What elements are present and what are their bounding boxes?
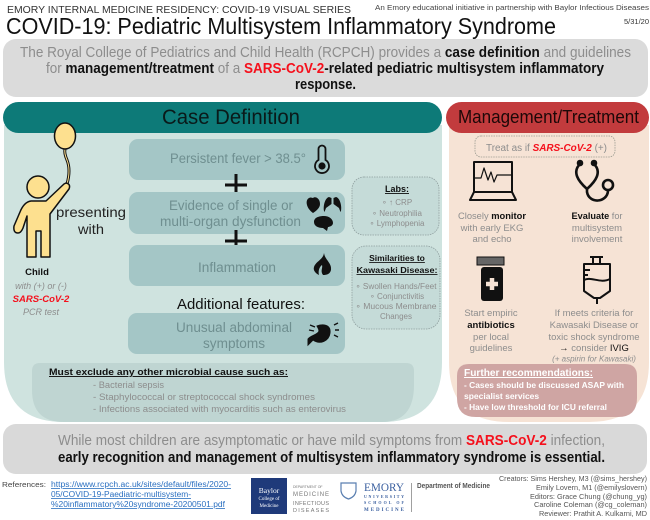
reference link: https://www.rcpch.ac.uk/sites/default/files/2020-: [51, 480, 231, 489]
further recommendations box: - Have low threshold for ICU referral: [464, 402, 607, 412]
labs box: ∘ ↑ CRP: [382, 198, 412, 207]
criterion: organ dysfunction: multi-organ dysfunction: [160, 214, 301, 229]
date: 5/31/20: [624, 17, 649, 26]
child caption: Child: [25, 267, 49, 278]
header series line: EMORY INTERNAL MEDICINE RESIDENCY: COVID-19 VISUAL SERIES: [7, 4, 351, 16]
presenting with label: presenting: [56, 204, 126, 220]
exclusion box: - Infections associated with myocarditis such as enterovirus: [93, 404, 347, 414]
criterion: inflammation: [129, 245, 345, 286]
reference link: %20inflammatory%20syndrome-20200501.pdf: [51, 500, 226, 509]
logo: department of medicine infectious diseases: INFECTIOUS: [293, 501, 329, 507]
criterion: persistent fever: Persistent fever > 38.5°: [170, 151, 306, 166]
title: COVID-19: Pediatric Multisystem Inflammatory Syndrome: [6, 13, 556, 39]
icon: heart, lungs and brain: [307, 197, 341, 231]
IVIG text: Kawasaki Disease or: [550, 320, 638, 331]
conclusion panel: early recognition and management of multisystem inflammatory syndrome is essential.: [58, 450, 605, 466]
IVIG text: [548, 308, 640, 364]
further recommendations box: Further recommendations:: [464, 368, 593, 379]
IVIG text: (+ aspirin for Kawasaki): [552, 354, 636, 364]
IVIG text: → consider IVIG: [559, 343, 629, 354]
labs box: [352, 177, 439, 235]
logo: Emory School of Medicine: UNIVERSITY: [364, 494, 404, 499]
intro panel: The Royal College of Pediatrics and Child Health (RCPCH) provides a case definition and guidelines: [20, 45, 631, 61]
conclusion panel: [3, 424, 647, 474]
presenting with label: [56, 204, 126, 237]
child caption: PCR test: [23, 307, 60, 317]
icon: monitor: [470, 162, 516, 200]
intro panel: [3, 39, 648, 97]
logo: department of medicine infectious diseases: DISEASES: [293, 508, 329, 514]
criterion: abdominal symptoms: Unusual abdominal: [176, 320, 292, 335]
case definition heading bar: [3, 102, 442, 133]
panel: management/treatment: [446, 102, 649, 422]
antibiotics text: per local: [473, 332, 509, 343]
logo: Emory School of Medicine: [364, 482, 405, 513]
exclusion box: [32, 363, 414, 422]
child caption: [13, 267, 70, 317]
references label: References:: [2, 480, 46, 489]
labs box: Labs:: [385, 184, 409, 194]
credits: Reviewer: Prathit A. Kulkarni, MD: [539, 509, 648, 518]
icon: antibiotics bottle: [477, 257, 504, 301]
kawasaki similarities box: ∘ Conjunctivitis: [370, 292, 424, 301]
additional features heading: Additional features:: [177, 297, 305, 313]
kawasaki similarities box: ∘ Mucous Membrane: [356, 302, 437, 311]
logo: department of medicine infectious diseases: DEPARTMENT OF: [293, 485, 323, 489]
evaluate text: multisystem: [572, 223, 622, 234]
kawasaki similarities box: Changes: [380, 312, 412, 321]
credits: Caroline Coleman (@cg_coleman): [534, 500, 647, 509]
evaluate text: Evaluate for: [572, 211, 622, 222]
logo: Baylor College of Medicine: Baylor: [259, 486, 280, 495]
child caption: with (+) or (-): [15, 281, 67, 291]
logo: Emory shield: [341, 483, 356, 499]
credits: Creators: Sims Hershey, M3 (@sims_hershey): [499, 474, 647, 483]
monitor text: Closely monitor: [458, 211, 526, 222]
reference link: [51, 480, 231, 509]
plus sign: [225, 230, 247, 252]
panel: case definition: [3, 102, 442, 422]
labs box: ∘ Neutrophilia: [372, 209, 423, 218]
antibiotics text: antibiotics: [467, 320, 515, 331]
monitor text: [458, 211, 526, 245]
plus sign: [225, 174, 247, 196]
further recommendations box: - Cases should be discussed ASAP with: [464, 380, 624, 390]
credits: Emily Lovern, M1 (@emilyslovern): [536, 483, 647, 492]
treat as if callout: [475, 136, 615, 157]
reference link: 05/COVID-19-Paediatric-multisystem-: [51, 490, 191, 499]
kawasaki similarities box: ∘ Swollen Hands/Feet: [356, 282, 437, 291]
further recommendations box: [457, 364, 637, 417]
case definition heading bar: Case Definition: [162, 106, 300, 129]
logo: Baylor College of Medicine: [251, 478, 287, 514]
criterion: inflammation: Inflammation: [198, 260, 276, 275]
antibiotics text: Start empiric: [464, 308, 518, 319]
exclusion box: - Staphylococcal or streptococcal shock syndromes: [93, 392, 316, 402]
logo: department of medicine infectious diseases: [293, 485, 329, 514]
icon: IV bag: [584, 257, 610, 304]
child caption: SARS-CoV-2: [13, 294, 70, 305]
conclusion panel: While most children are asymptomatic or have mild symptoms from SARS-CoV-2 infection,: [58, 433, 605, 449]
evaluate text: involvement: [572, 234, 623, 245]
icon: stomach: [308, 323, 339, 345]
criterion: organ dysfunction: [129, 192, 345, 234]
icon: stethoscope: [576, 161, 613, 201]
logo: Baylor College of Medicine: College of: [259, 497, 280, 502]
criterion: persistent fever: [129, 139, 345, 180]
logo: Emory School of Medicine: SCHOOL OF: [364, 500, 405, 505]
intro panel: for management/treatment of a SARS-CoV-2-related pediatric multisystem inflammatory: [46, 61, 604, 77]
logo: department of medicine infectious diseases: MEDICINE: [293, 492, 329, 498]
logo: Emory School of Medicine: EMORY: [364, 482, 405, 494]
criterion: organ dysfunction: Evidence of single or: [169, 198, 293, 213]
exclusion box: Must exclude any other microbial cause such as:: [49, 367, 288, 378]
kawasaki similarities box: [352, 246, 440, 329]
icon: thermometer: [315, 146, 329, 173]
credits: Editors: Grace Chung (@chung_yg): [530, 492, 647, 501]
credits: [499, 474, 648, 518]
evaluate text: [572, 211, 623, 245]
management heading bar: Management/Treatment: [458, 107, 639, 127]
management heading bar: [446, 102, 649, 133]
further recommendations box: specialist services: [464, 391, 539, 401]
icon: flame: [314, 253, 331, 275]
IVIG text: If meets criteria for: [555, 308, 633, 319]
antibiotics text: guidelines: [470, 343, 513, 354]
logo: Emory School of Medicine: MEDICINE: [364, 508, 405, 513]
department of medicine label: [411, 483, 490, 512]
department of medicine label: Department of Medicine: [417, 483, 490, 490]
exclusion box: - Bacterial sepsis: [93, 380, 165, 390]
kawasaki similarities box: Similarities to: [369, 253, 425, 263]
labs box: ∘ Lymphopenia: [370, 219, 425, 228]
IVIG text: toxic shock syndrome: [548, 332, 640, 343]
logo: Baylor College of Medicine: Medicine: [260, 504, 279, 509]
presenting with label: with: [77, 221, 104, 237]
criterion: abdominal symptoms: [128, 313, 345, 354]
antibiotics text: [464, 308, 518, 354]
monitor text: with early EKG: [460, 223, 523, 234]
intro panel: response.: [295, 77, 356, 93]
icon: child with balloon: [14, 123, 76, 257]
monitor text: and echo: [472, 234, 512, 245]
criterion: abdominal symptoms: symptoms: [203, 336, 265, 351]
kawasaki similarities box: Kawasaki Disease:: [356, 265, 438, 275]
treat as if callout: Treat as if SARS-CoV-2 (+): [486, 143, 607, 154]
partnership note: An Emory educational initiative in partnership with Baylor Infectious Diseases: [375, 3, 649, 12]
